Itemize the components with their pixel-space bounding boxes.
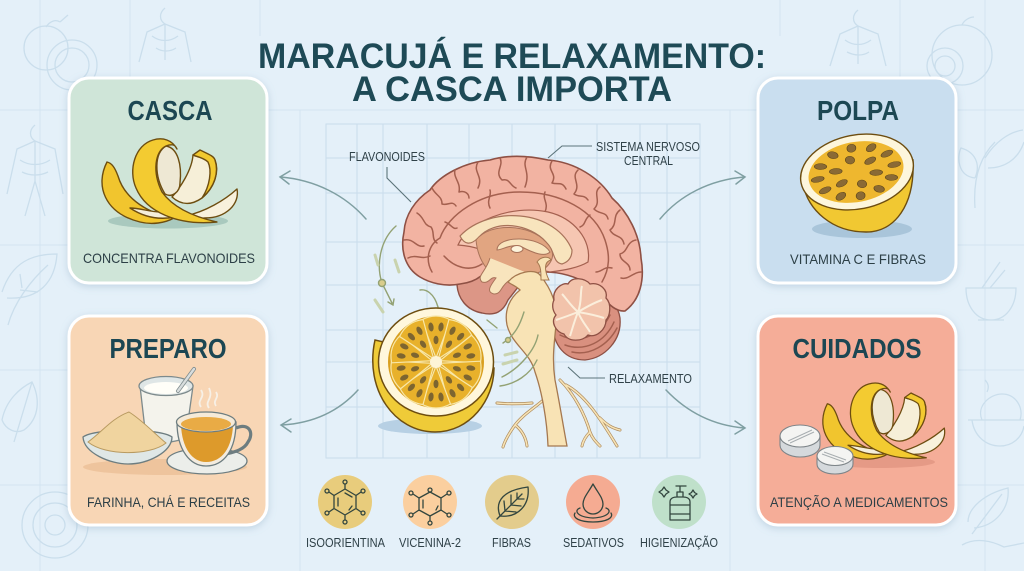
callout: flavonoides: FLAVONOIDES xyxy=(349,149,425,164)
panel: cuidados xyxy=(758,316,956,525)
cerebellum base xyxy=(553,295,620,360)
label: vicenina-2: VICENINA-2 xyxy=(399,535,461,550)
nerves xyxy=(497,380,620,447)
caption: preparo: FARINHA, CHÁ E RECEITAS xyxy=(87,494,250,510)
title: MARACUJÁ E RELAXAMENTO: xyxy=(258,36,766,76)
caption: casca: CONCENTRA FLAVONOIDES xyxy=(83,250,255,266)
icon: isoorientina xyxy=(318,475,372,529)
icon: sedativos xyxy=(566,475,620,529)
panel: polpa xyxy=(758,78,956,283)
heading: polpa: POLPA xyxy=(817,95,899,126)
caption: cuidados: ATENÇÃO A MEDICAMENTOS xyxy=(770,494,948,510)
inner limbic band xyxy=(458,210,589,272)
callout: relaxamento: RELAXAMENTO xyxy=(609,371,692,386)
cerebellum xyxy=(553,279,610,340)
icon: peel and pills xyxy=(780,383,945,474)
temporal lobe xyxy=(457,262,522,314)
panel: casca xyxy=(69,78,267,283)
icon row xyxy=(306,475,718,550)
heading: cuidados: CUIDADOS xyxy=(792,333,922,364)
callout: flavonoides xyxy=(349,149,425,202)
brain illustration xyxy=(403,156,642,447)
panel: preparo xyxy=(69,316,267,525)
brainstem xyxy=(506,271,567,446)
heading: preparo: PREPARO xyxy=(110,333,226,364)
cerebrum xyxy=(403,156,642,311)
label: sedativos: SEDATIVOS xyxy=(563,535,624,550)
decorative icons left xyxy=(2,8,191,558)
decorative icons right xyxy=(830,10,1024,547)
heading: casca: CASCA xyxy=(128,95,212,126)
thalamus xyxy=(476,227,553,294)
arrow: to casca xyxy=(280,171,366,219)
callout: sistema nervoso central: SISTEMA NERVOSO xyxy=(596,139,700,154)
arrow: to cuidados xyxy=(666,390,745,434)
icon: higienizacao xyxy=(652,475,706,529)
caption: polpa: VITAMINA C E FIBRAS xyxy=(790,251,926,267)
label: higienizacao: HIGIENIZAÇÃO xyxy=(640,535,718,550)
corpus callosum xyxy=(460,216,572,264)
label: isoorientina: ISOORIENTINA xyxy=(306,535,385,550)
icon: flour, yogurt and tea xyxy=(83,369,251,475)
central grid panel xyxy=(326,124,700,458)
gyri xyxy=(404,157,641,282)
icon: vicenina-2 xyxy=(403,475,457,529)
callout: sistema nervoso central xyxy=(548,139,700,168)
label: fibras: FIBRAS xyxy=(492,535,531,550)
callout: sistema nervoso central: CENTRAL xyxy=(624,153,673,168)
icon: fibras xyxy=(485,475,539,529)
icon: peel xyxy=(102,139,237,228)
compound flow arrows xyxy=(375,226,538,386)
arrow: to preparo xyxy=(281,390,358,432)
callout: relaxamento xyxy=(568,367,692,386)
arrow: to polpa xyxy=(660,171,745,219)
title: A CASCA IMPORTA xyxy=(352,70,672,109)
passion fruit cross-section xyxy=(373,308,494,434)
title xyxy=(258,36,766,109)
icon: halved passion fruit xyxy=(794,125,920,238)
